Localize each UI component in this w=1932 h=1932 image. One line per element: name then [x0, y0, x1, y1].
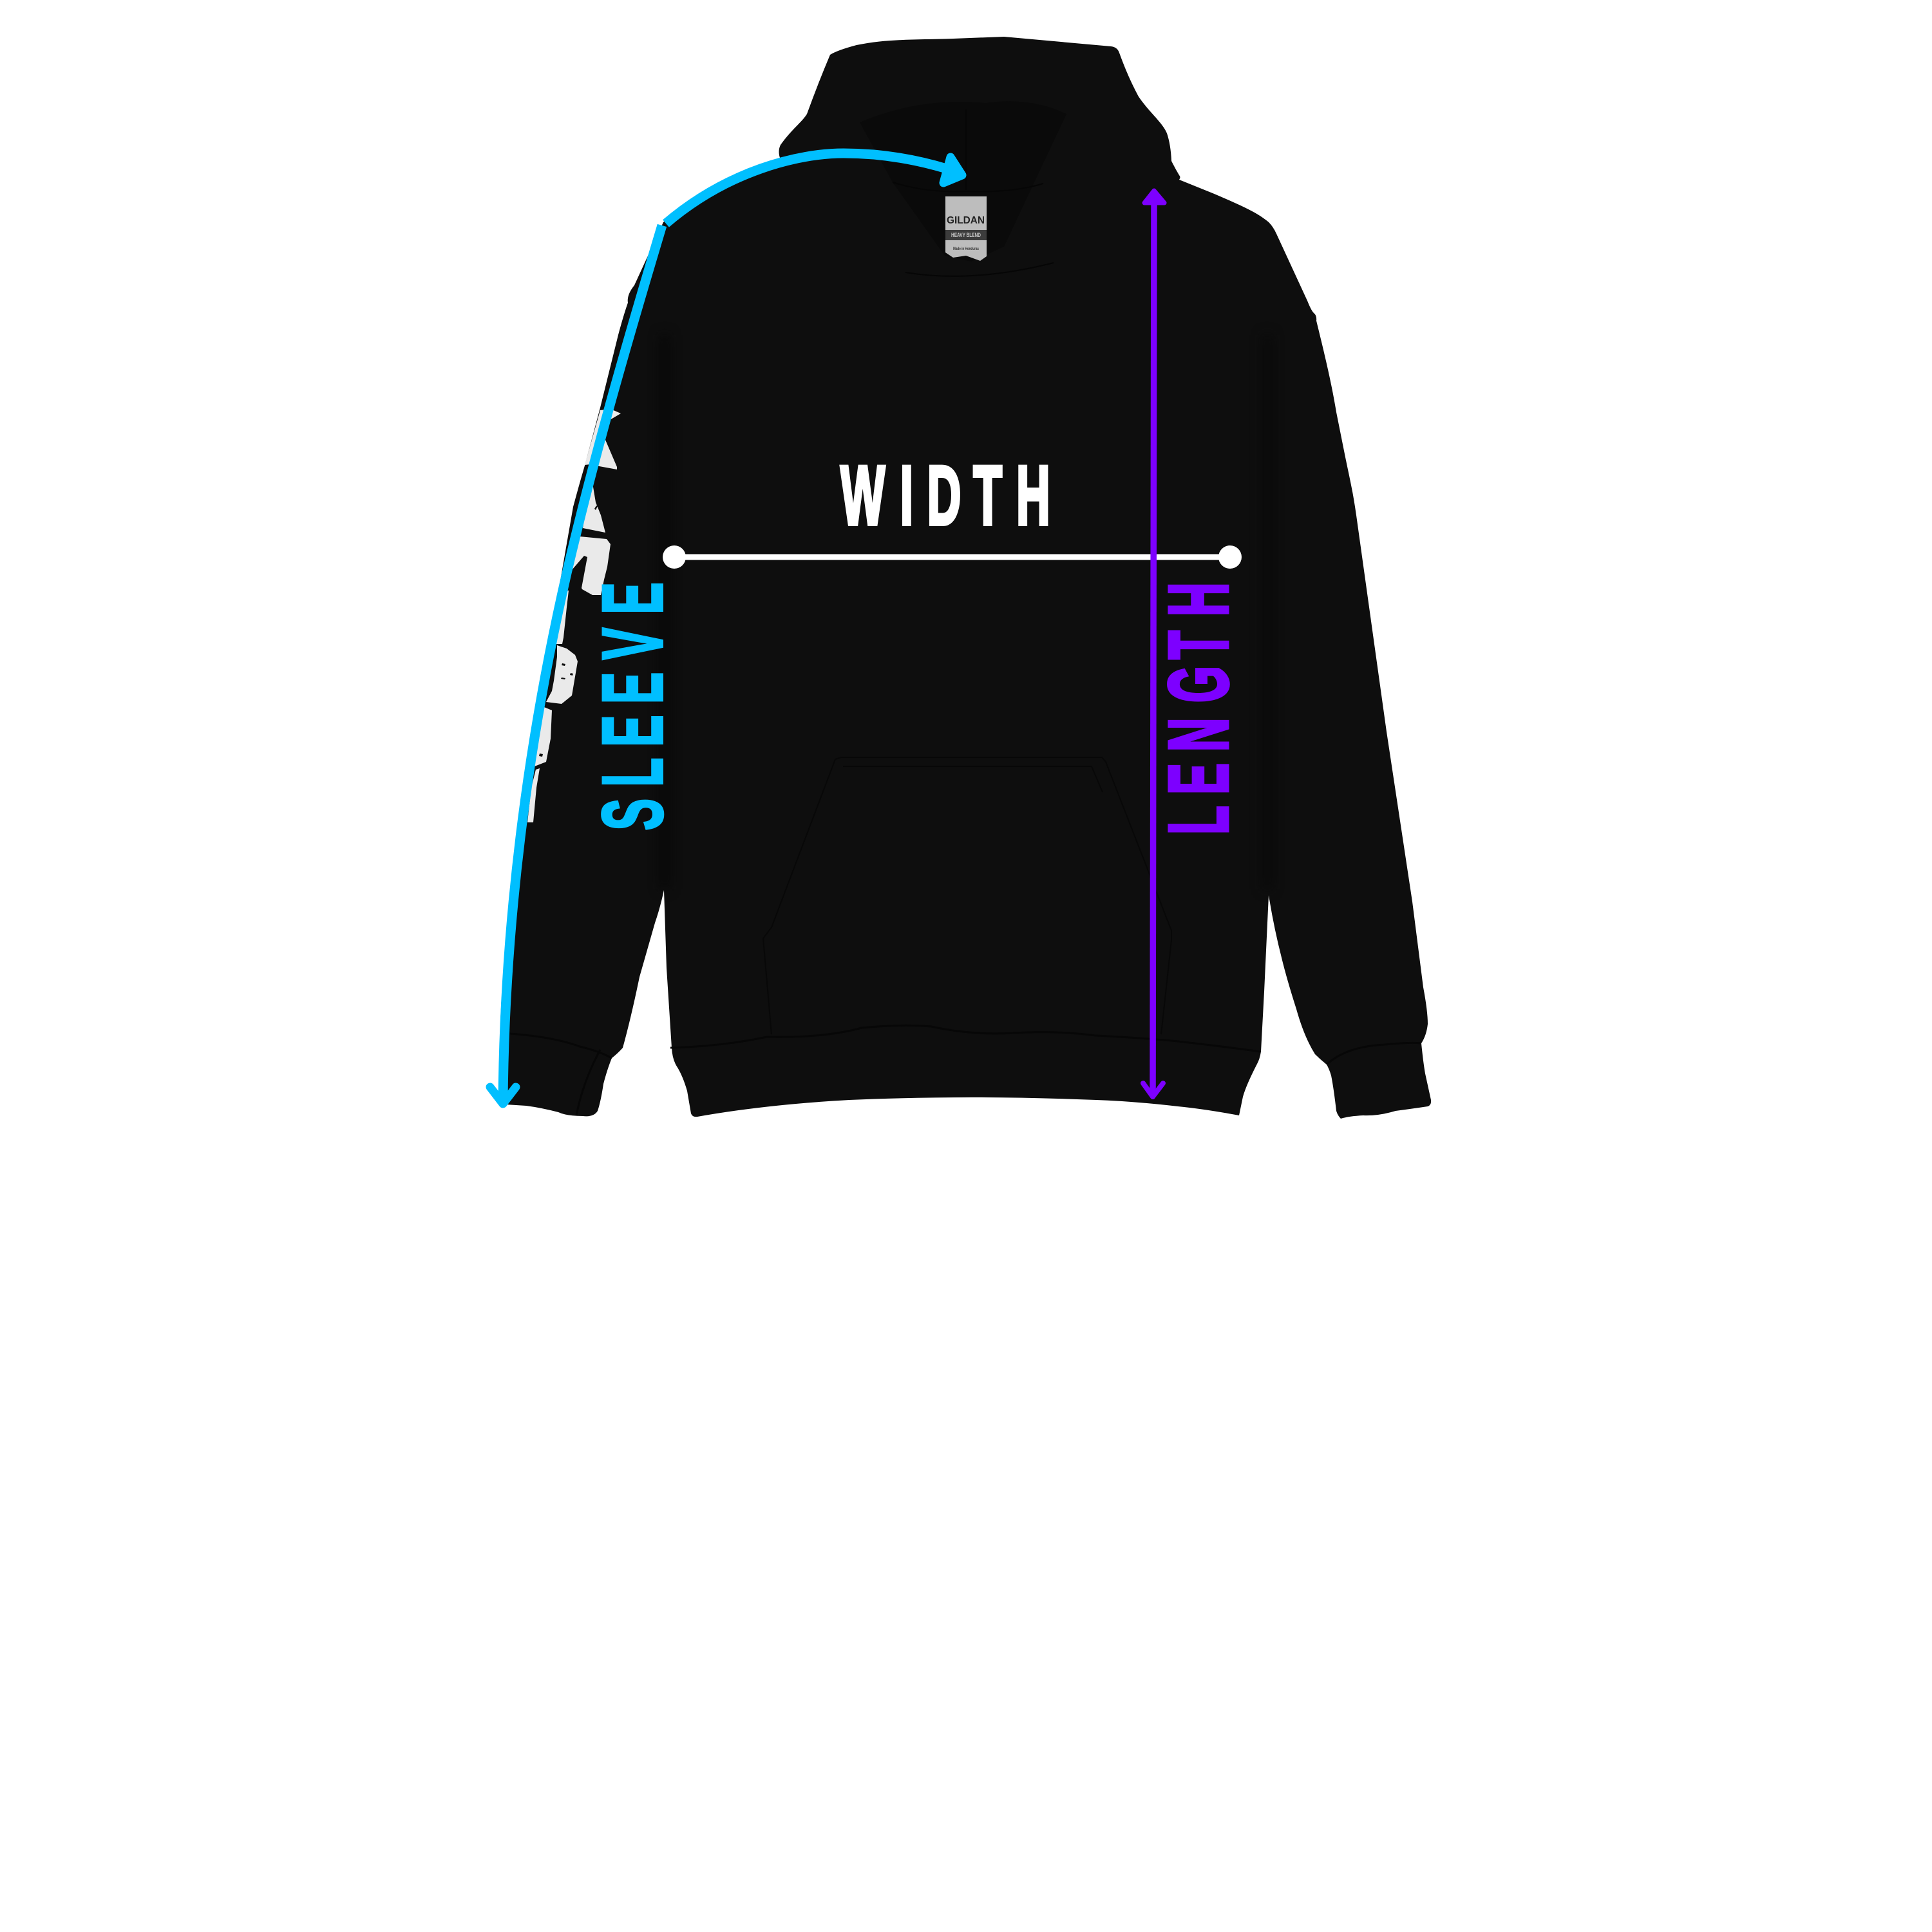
hoodie: [500, 37, 1431, 1119]
hood seams: [893, 109, 1054, 276]
width endpoint right: [1218, 545, 1242, 569]
length measure: [1143, 191, 1245, 1097]
width endpoint left: [663, 545, 686, 569]
hoodie silhouette: [500, 37, 1431, 1119]
sleeve measure: [490, 153, 962, 1104]
sleeve print: [527, 409, 621, 822]
hood interior: [860, 101, 1066, 261]
length arrow head bottom: [1143, 1083, 1163, 1097]
shoulder arc arrow: [666, 153, 947, 223]
fabric shading: [661, 335, 1271, 889]
label product line: HEAVY BLEND: [951, 232, 981, 238]
hem rib seam: [670, 1025, 1260, 1052]
label origin text: Made in Honduras: [953, 247, 980, 251]
sleeve label: SLEEVE: [584, 582, 680, 831]
width measure: [663, 450, 1242, 569]
label brand: GILDAN: [947, 215, 985, 226]
width label: WIDTH: [840, 450, 1050, 542]
cuff seams: [510, 1034, 1421, 1115]
print distress specks: [539, 506, 598, 757]
length line: [1153, 201, 1154, 1096]
length arrow head top: [1144, 191, 1164, 203]
shoulder arrow head: [943, 157, 962, 183]
width line: [674, 554, 1230, 560]
sleeve line: [503, 225, 662, 1103]
sleeve arrow head: [490, 1087, 516, 1104]
neck label: [945, 196, 987, 261]
kangaroo pocket: [763, 757, 1171, 1034]
length label: LENGTH: [1152, 582, 1245, 835]
